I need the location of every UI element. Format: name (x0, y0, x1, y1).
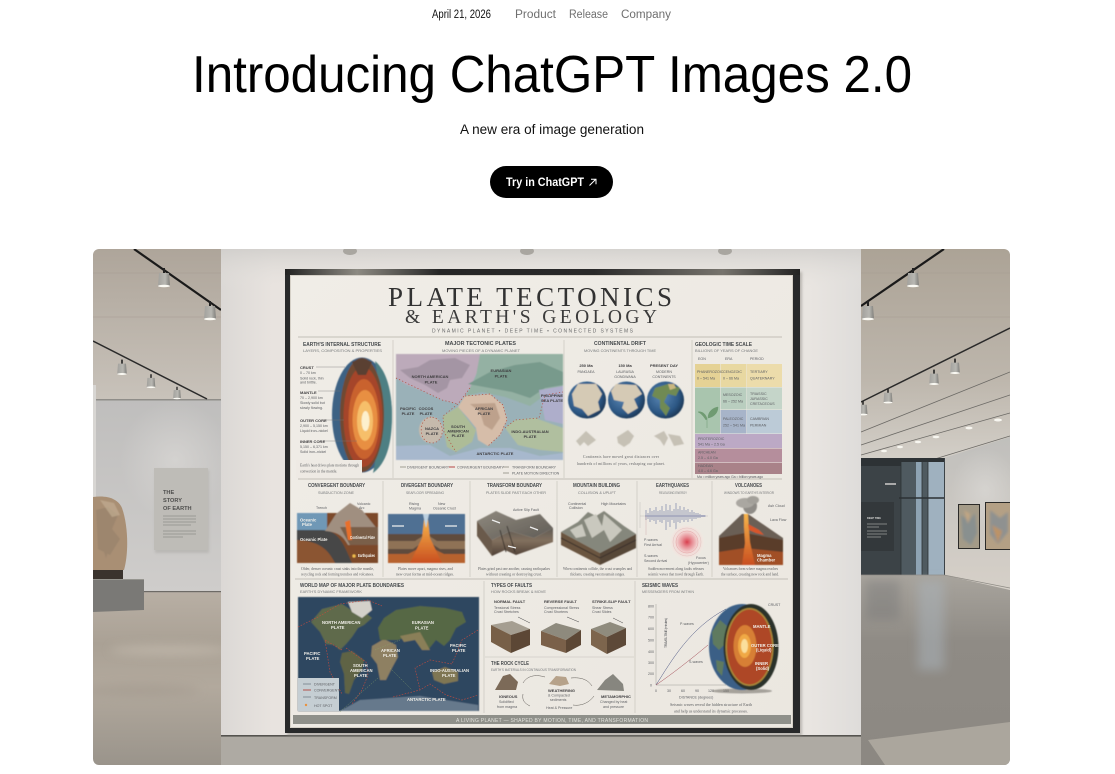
caption (577, 455, 665, 467)
fault: strike-slip (591, 599, 631, 654)
time scale table: TRIASSIC (750, 392, 767, 396)
map legend: TRANSFORM BOUNDARY (512, 466, 557, 470)
time scale table: CENOZOIC (723, 370, 742, 374)
map: world boundaries: INDO-AUSTRALIAN (430, 668, 469, 673)
diagram: subduction: Earthquakes (358, 553, 375, 558)
globe: 250 Ma (568, 382, 606, 418)
note box: convection in the mantle. (300, 470, 337, 474)
chart: travel time curves: 0 (650, 684, 652, 688)
map: world boundaries: AFRICAN (381, 648, 400, 653)
rock: sedimentary: & Compacted (548, 694, 570, 698)
panel: volcanoes: WINDOWS TO EARTH'S INTERIOR (724, 491, 774, 495)
layer labels: Solid rock, thin (300, 376, 324, 380)
panel: seismic waves: and help us understand its dynamic processes. (674, 710, 748, 714)
diagram: cutaway globe: (Solid) (756, 666, 770, 671)
panel: rock cycle: THE ROCK CYCLE (491, 661, 529, 667)
layer labels: 5,150 – 6,371 km (300, 445, 328, 449)
map legend box: DIVERGENT (314, 682, 336, 686)
panel: mountain building: COLLISION & UPLIFT (578, 491, 617, 495)
map legend box: CONVERGENT (314, 688, 340, 692)
caption: hundreds of millions of years, reshaping our planet. (577, 462, 665, 467)
map legend box: HOT SPOT (314, 704, 333, 708)
panel: world map of plate boundaries: WORLD MAP OF MAJOR PLATE BOUNDARIES (300, 583, 404, 589)
chart: seismogram (640, 502, 708, 535)
map: tectonic plates: SOUTH (451, 424, 465, 429)
map legend (400, 466, 560, 476)
panel: major tectonic plates (396, 341, 563, 476)
rock: igneous: IGNEOUS (499, 694, 518, 699)
map: world boundaries: AMERICAN (350, 668, 373, 673)
map: tectonic plates: PLATE (425, 380, 438, 384)
time scale table: PROTEROZOIC (698, 437, 725, 441)
map: world boundaries: PLATE (383, 653, 397, 658)
panel: convergent boundary: SUBDUCTION ZONE (318, 491, 354, 495)
rock: igneous (495, 674, 518, 709)
icon: epicentre rings (670, 525, 704, 559)
rock: metamorphic: METAMORPHIC (601, 694, 631, 699)
map: tectonic plates: NAZCA (425, 426, 439, 431)
diagram: volcano: Magma (757, 553, 772, 558)
chart: travel time curves: 300 (648, 661, 654, 665)
panel: earthquakes (640, 483, 709, 576)
fault: normal (491, 599, 530, 653)
panel: seismic waves (642, 583, 781, 714)
panel: transform boundary: TRANSFORM BOUNDARY (487, 483, 542, 489)
diagram: mountain block: Continental (568, 502, 586, 506)
chart: travel time curves: 30 (667, 689, 671, 693)
time scale table: 252 – 541 Ma (723, 424, 745, 428)
panel: transform boundary: without creating or destroying crust. (486, 572, 542, 576)
diagram: volcano (719, 496, 787, 565)
date and tags row: Product (515, 9, 557, 21)
hero photo: gallery scene (80, 247, 1019, 765)
layer labels: CRUST (300, 365, 314, 370)
map: tectonic plates: PLATE (495, 374, 508, 378)
poster title: DYNAMIC PLANET • DEEP TIME • CONNECTED SYSTEMS (432, 328, 634, 334)
panel: divergent boundary: DIVERGENT BOUNDARY (401, 483, 453, 489)
time scale table: 2.5 – 4.0 Ga (698, 456, 718, 460)
panel: geologic time scale (695, 342, 782, 479)
layer labels: MANTLE (300, 390, 317, 395)
footer band (293, 715, 791, 724)
diagram: cutaway globe: OUTER CORE (751, 643, 779, 648)
diagram: subduction: Arc (359, 506, 365, 510)
panel: geologic time scale: GEOLOGIC TIME SCALE (695, 342, 752, 348)
layer labels: 2,900 – 5,150 km (300, 424, 328, 428)
subtitle: A new era of image generation (460, 122, 644, 137)
panel: volcanoes: the surface, creating new rock and land. (721, 572, 779, 578)
panel: mountain building: MOUNTAIN BUILDING (573, 483, 620, 489)
chart: travel time curves: 120 (708, 689, 714, 693)
map: tectonic plates: COCOS (419, 406, 434, 411)
floor strip and gallery wall (221, 249, 861, 765)
note box: Earth's heat drives plate motions through (300, 464, 359, 468)
diagram: cutaway globe: CRUST (768, 603, 781, 607)
diagram: mountain block: High Mountains (601, 502, 626, 506)
panel: divergent boundary (388, 483, 465, 576)
layer labels: OUTER CORE (300, 418, 327, 423)
time scale table: 4.0 – 4.6 Ga (698, 469, 718, 473)
rock: sedimentary: sediments (550, 698, 567, 702)
panel: earth's internal structure (296, 342, 392, 478)
diagram: volcano: Chamber (757, 558, 776, 562)
diagram: strike-slip block: Active Slip Fault (513, 508, 539, 512)
rock: sedimentary: Heat & Pressure (546, 706, 572, 710)
panel: convergent boundary: CONVERGENT BOUNDARY (308, 483, 365, 489)
sign: the story of earth: OF EARTH (163, 506, 192, 512)
map: world boundaries: SOUTH (353, 663, 368, 668)
panel: seismic waves: Seismic waves reveal the hidden structure of Earth (670, 703, 752, 707)
rock: igneous: from magma (497, 705, 517, 709)
time scale table: TERTIARY (750, 370, 768, 374)
panel: earthquakes: Sudden movement along faults releases (648, 567, 705, 571)
chart: travel time curves: DISTANCE (degrees) (679, 696, 713, 700)
map: world boundaries: PLATE (331, 625, 345, 630)
panel: continental drift: 150 Ma (618, 363, 632, 368)
panel: earthquakes: P-waves (644, 538, 658, 542)
panel: volcanoes: VOLCANOES (735, 483, 762, 489)
panel: convergent boundary: Older, denser oceanic crust sinks into the mantle, (301, 567, 374, 572)
diagram: cutaway globe: MANTLE (753, 624, 771, 629)
map: world boundaries: EURASIAN (412, 620, 434, 625)
panel: earthquakes: S-waves (644, 554, 658, 558)
panel: earth's internal structure: LAYERS, COMPOSITION & PROPERTIES (303, 349, 382, 353)
footer band: A LIVING PLANET — SHAPED BY MOTION, TIME, AND TRANSFORMATION (456, 718, 648, 724)
diagram: subduction: Trench (316, 506, 327, 510)
layer labels: 70 – 2,900 km (300, 396, 323, 400)
diagram: mountain block (561, 502, 636, 565)
rock: metamorphic (597, 674, 631, 709)
panel: rock cycle (491, 661, 631, 710)
time scale table: MESOZOIC (723, 393, 743, 397)
title: Introducing ChatGPT Images 2.0 (192, 46, 912, 104)
fault: normal: NORMAL FAULT (494, 599, 526, 604)
mini continent maps (576, 430, 684, 447)
panel: geologic time scale: ERA (725, 357, 733, 361)
map: world boundaries: PLATE (354, 673, 368, 678)
map: tectonic plates: PLATE (452, 433, 465, 438)
chart: travel time curves: 600 (648, 627, 654, 631)
map: tectonic plates: NORTH AMERICAN (412, 374, 448, 379)
rock on pedestal (93, 496, 144, 612)
layer labels: Slowly solid but (300, 401, 325, 405)
panel: continental drift: PRESENT DAY (650, 363, 678, 368)
time scale table (695, 364, 782, 474)
panel: geologic time scale: BILLIONS OF YEARS OF CHANGE (695, 349, 758, 353)
panel: geologic time scale: EON (698, 357, 706, 361)
poster frame (285, 269, 802, 736)
diagram: rift: Rising (409, 502, 419, 506)
map: world boundaries: ANTARCTIC PLATE (407, 697, 446, 702)
panel: earthquakes: RELEASING ENERGY (659, 491, 687, 495)
poster title: & EARTH'S GEOLOGY (405, 307, 657, 328)
map legend box (298, 678, 340, 711)
diagram: subduction (297, 502, 378, 563)
map legend: DIVERGENT BOUNDARY (407, 466, 450, 470)
layer labels (300, 365, 357, 454)
panel: continental drift (568, 341, 684, 467)
time scale table: 66 – 252 Ma (723, 400, 743, 404)
panel: geologic time scale: PERIOD (750, 357, 764, 361)
map legend: CONVERGENT BOUNDARY (457, 466, 504, 470)
diagram: cutaway globe: (Liquid) (756, 648, 772, 652)
map: tectonic plates: INDO-AUSTRALIAN (511, 429, 549, 434)
panel: divergent boundary: SEAFLOOR SPREADING (406, 491, 444, 495)
fault: reverse: REVERSE FAULT (544, 599, 577, 604)
layer labels: slowly flowing. (300, 406, 323, 410)
date and tags row (432, 9, 671, 21)
panel: transform boundary: PLATES SLIDE PAST EACH OTHER (486, 491, 546, 495)
time scale table: CRETACEOUS (750, 402, 775, 406)
panel: geologic time scale: Ma = million years ago Ga = billion years ago (697, 475, 763, 479)
panel: seismic waves: SEISMIC WAVES (642, 583, 678, 589)
rock: igneous: Solidified (499, 700, 514, 704)
map: tectonic plates: AMERICAN (447, 428, 469, 434)
time scale table: 0 – 541 Ma (697, 376, 715, 380)
right gallery room (858, 249, 1019, 765)
time scale table: PHANEROZOIC (697, 370, 724, 374)
diagram: cutaway globe: INNER (755, 661, 768, 666)
map: tectonic plates: PLATE (524, 434, 537, 439)
panel: divergent boundary: Plates move apart, magma rises, and (398, 567, 453, 572)
time scale table: QUATERNARY (750, 376, 775, 380)
time scale table: 0 – 66 Ma (723, 376, 739, 380)
paintings on right wall (958, 502, 1011, 550)
rock: metamorphic: Changed by heat (600, 700, 627, 704)
fault: reverse: Compressional Stress (544, 606, 579, 610)
map: tectonic plates (396, 354, 563, 460)
chart: travel time curves: 90 (695, 689, 699, 693)
map: tectonic plates: PHILIPPINE (541, 393, 563, 398)
map: world boundaries (298, 597, 479, 712)
panel: continental drift: PANGAEA (577, 370, 595, 374)
panel: types of faults: TYPES OF FAULTS (491, 583, 532, 589)
date and tags row: Company (621, 9, 671, 21)
diagram: subduction: Continental Plate (350, 535, 375, 540)
chart: travel time curves: 150 (723, 689, 729, 693)
fault: reverse (541, 599, 581, 653)
fault: strike-slip: Crust Slides (592, 610, 612, 614)
panel: transform boundary: Plates grind past one another, causing earthquakes (478, 567, 551, 572)
panel: world map of plate boundaries: EARTH'S DYNAMIC FRAMEWORK (300, 590, 362, 594)
sign: the story of earth: STORY (163, 498, 182, 504)
diagram: subduction: Volcanic (357, 502, 371, 506)
panel: mountain building: When continents collide, the crust crumples and (563, 567, 632, 572)
map: tectonic plates: PLATE (420, 411, 433, 416)
panel: continental drift: MODERN (656, 370, 672, 374)
map: tectonic plates: PACIFIC (400, 406, 416, 411)
sign: the story of earth: THE (163, 490, 174, 496)
arrows: rock cycle (523, 676, 594, 706)
panel: world map of plate boundaries (298, 583, 479, 712)
spotlights above poster (343, 249, 732, 255)
panel: convergent boundary (297, 483, 378, 576)
time scale table: 541 Ma – 2.5 Ga (698, 442, 725, 446)
panel: continental drift: CONTINENTS (652, 375, 676, 379)
diagram: rift: New (438, 502, 446, 506)
sign: the story of earth (154, 468, 209, 553)
panel: mountain building (561, 483, 636, 578)
panel: mountain building: thickens, creating vast mountain ranges. (570, 572, 625, 578)
layer labels: INNER CORE (300, 439, 325, 444)
diagram: subduction: Oceanic Plate (300, 537, 328, 542)
chart: travel time curves: 60 (681, 689, 685, 693)
chart: travel time curves: TRAVEL TIME (minutes) (664, 618, 668, 648)
map: tectonic plates: SEA PLATE (541, 398, 563, 403)
panel: continental drift: 250 Ma (579, 363, 593, 368)
map: tectonic plates: ANTARCTIC PLATE (477, 451, 514, 456)
chart: travel time curves (648, 604, 729, 700)
chart: travel time curves: 200 (648, 672, 654, 676)
poster title: PLATE TECTONICS (388, 282, 672, 312)
time scale table: PALEOZOIC (723, 417, 744, 421)
panel: earthquakes: EARTHQUAKES (656, 483, 689, 489)
map: world boundaries: PLATE (415, 626, 429, 630)
panel: continental drift: CONTINENTAL DRIFT (594, 341, 647, 347)
panel: earthquakes: Focus (696, 556, 706, 560)
chart: travel time curves: 0 (655, 689, 657, 693)
globe: present day (647, 382, 684, 418)
map: tectonic plates: PLATE (478, 411, 491, 416)
map: world boundaries: PLATE (442, 673, 456, 678)
panel: volcanoes: Volcanoes form where magma reaches (723, 567, 779, 571)
panel: earthquakes: seismic waves that travel through Earth. (648, 572, 704, 576)
diagram: subduction: Plate (302, 522, 313, 527)
chart: travel time curves: 700 (648, 616, 654, 620)
fault: strike-slip: STRIKE-SLIP FAULT (592, 599, 631, 604)
rock: sedimentary: WEATHERING (548, 688, 575, 693)
map legend: PLATE MOTION DIRECTION (512, 472, 560, 476)
date and tags row: April 21, 2026 (432, 9, 491, 21)
chart: travel time curves: P-waves (680, 622, 694, 626)
caption: Continents have moved great distances over (583, 455, 660, 459)
poster title (388, 282, 672, 334)
icon: external arrow (590, 179, 596, 186)
panel: divergent boundary: new crust forms at mid-ocean ridges. (396, 572, 454, 576)
fault: strike-slip: Shear Stress (592, 606, 613, 610)
diagram: rift: Magma (409, 506, 421, 510)
panel: types of faults: HOW ROCKS BREAK & MOVE (491, 590, 546, 594)
layer labels: 0 – 70 km (300, 371, 316, 375)
panel: seismic waves: MESSENGERS FROM WITHIN (642, 590, 694, 594)
panel: continental drift: LAURASIA (616, 370, 634, 374)
diagram: mountain block: Collision (569, 506, 583, 510)
rock: metamorphic: and pressure (603, 705, 624, 709)
date and tags row: Release (569, 9, 608, 21)
time scale table: JURASSIC (750, 397, 768, 401)
panel: continental drift: MOVING CONTINENTS THROUGH TIME (584, 349, 656, 353)
time scale table: HADEAN (698, 464, 713, 468)
layer labels: Solid iron–nickel (300, 450, 326, 454)
panel: earthquakes: Second Arrival (644, 559, 667, 563)
time scale table: PERMIAN (750, 424, 767, 428)
panel: transform boundary (477, 483, 553, 576)
diagram: cutaway globe (709, 603, 781, 694)
chart: travel time curves: 800 (648, 604, 654, 608)
map: world boundaries: PACIFIC (304, 651, 320, 656)
time scale table: ARCHEAN (698, 450, 716, 454)
left gallery room (93, 249, 221, 765)
layer labels: and brittle. (300, 380, 317, 384)
diagram: cutaway earth (332, 358, 392, 473)
map: world boundaries: PLATE (452, 648, 466, 653)
fault: normal: Tensional Stress (494, 606, 521, 610)
layer labels: Liquid iron–nickel (300, 429, 328, 433)
panel: types of faults (491, 583, 631, 654)
panel: volcanoes (719, 483, 787, 578)
icon: leaves (698, 407, 718, 428)
panel: major tectonic plates: MOVING PIECES OF A DYNAMIC PLANET (442, 349, 521, 353)
panel: earthquakes: (Hypocenter) (688, 561, 709, 565)
button: try in ChatGPT: Try in ChatGPT (506, 177, 584, 189)
panel: convergent boundary: recycling rock and forming trenches and volcanoes. (301, 572, 374, 576)
poster: plate tectonics (285, 269, 802, 736)
fault: normal: Crust Stretches (494, 610, 519, 614)
map: tectonic plates: EURASIAN (491, 368, 512, 373)
diagram: volcano: Lava Flow (770, 518, 787, 522)
chart: travel time curves: 500 (648, 638, 654, 642)
diagram: subduction: Oceanic (300, 518, 317, 522)
panel: major tectonic plates: MAJOR TECTONIC PLATES (445, 341, 516, 347)
diagram: rift (388, 502, 465, 563)
chart: travel time curves: 400 (648, 650, 654, 654)
map: tectonic plates: PLATE (426, 431, 439, 436)
button: try in ChatGPT (490, 166, 613, 198)
globe: 150 Ma (608, 382, 645, 418)
map: world boundaries: PLATE (306, 656, 320, 661)
right gallery room: DEEP TIME (867, 516, 881, 520)
time scale table: CAMBRIAN (750, 417, 769, 421)
diagram: volcano: Ash Cloud (768, 504, 785, 508)
map: world boundaries: NORTH AMERICAN (322, 620, 360, 625)
note box (296, 460, 362, 478)
panel: continental drift: GONDWANA (614, 375, 636, 379)
fault: reverse: Crust Shortens (544, 610, 568, 614)
panel: earth's internal structure: EARTH'S INTERNAL STRUCTURE (303, 342, 381, 348)
map: tectonic plates: PLATE (402, 411, 415, 416)
map: world boundaries: PACIFIC (450, 643, 466, 648)
chart: travel time curves: S-waves (689, 660, 703, 664)
panel: rock cycle: EARTH'S MATERIALS IN CONTINUOUS TRANSFORMATION (491, 668, 576, 672)
map: tectonic plates: AFRICAN (475, 406, 493, 411)
panel: earthquakes: First Arrival (644, 543, 662, 547)
map legend box: TRANSFORM (314, 696, 337, 700)
diagram: rift: Oceanic Crust (433, 506, 456, 510)
rock: sedimentary (546, 676, 575, 710)
